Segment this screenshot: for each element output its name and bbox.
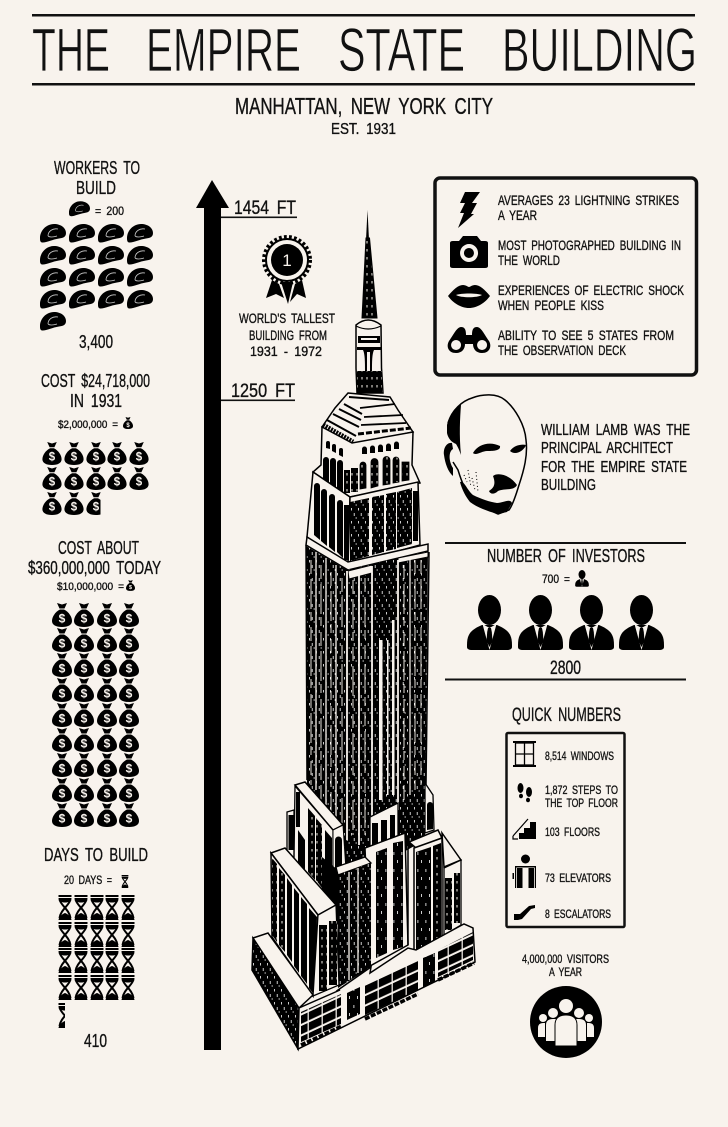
fact text: [498, 193, 684, 358]
illustration: empire state building: [252, 210, 475, 1049]
icon: visitors group: [530, 986, 602, 1058]
heading: quick numbers: QUICK NUMBERS: [512, 705, 621, 726]
tallest building caption: BUILDING FROM: [249, 328, 327, 343]
subtitle: EST. 1931: [331, 121, 396, 138]
panel: number of investors: [445, 542, 686, 680]
quick number text: 8 ESCALATORS: [545, 907, 611, 921]
title: STATE: [338, 16, 465, 84]
crown steps: [322, 393, 413, 445]
icon: binoculars: [448, 327, 490, 353]
lower right wings: [409, 830, 461, 960]
lower left wing: [271, 848, 339, 996]
height label: 1250 ft: 1250 FT: [231, 381, 295, 402]
visitors caption: 4,000,000 VISITORS: [522, 954, 609, 966]
panel: quick numbers: [506, 733, 624, 927]
panel: cost today: $360,000,000 TODAY: [28, 557, 161, 578]
icon: camera: [450, 236, 488, 268]
base: [252, 924, 475, 1049]
icon: first-place ribbon: 1: [282, 251, 292, 270]
panel: workers to build: 3,400: [79, 331, 113, 352]
icon: footprints: [518, 783, 532, 802]
second tier: [306, 472, 428, 570]
title: EMPIRE: [146, 16, 301, 84]
arrow: height scale: [196, 180, 229, 1050]
icon: elevator: [512, 854, 536, 888]
panel: days to build: 410: [84, 1030, 107, 1051]
quick number text: 103 FLOORS: [545, 825, 600, 839]
panel: number of investors: NUMBER OF INVESTORS: [487, 545, 645, 566]
panel: cost today: COST ABOUT: [58, 537, 139, 558]
panel: workers to build: BUILD: [76, 177, 116, 198]
panel: cost in 1931: IN 1931: [70, 390, 122, 411]
icon: first-place ribbon: [264, 238, 310, 304]
panel: number of investors: 2800: [550, 658, 581, 679]
quick number text: 73 ELEVATORS: [545, 871, 611, 885]
panel: building facts: [435, 178, 696, 375]
panel: cost in 1931: [41, 370, 150, 515]
panel: cost today: [28, 537, 161, 827]
fact text: ABILITY TO SEE 5 STATES FROM: [498, 328, 674, 343]
icon: lightning bolt: [458, 192, 480, 228]
panel: workers to build: WORKERS TO: [54, 157, 140, 178]
subtitle: MANHATTAN, NEW YORK CITY: [235, 93, 493, 119]
tallest building caption: WORLD'S TALLEST: [239, 311, 335, 326]
upper tier: [313, 427, 420, 497]
portrait: william lamb: [444, 395, 527, 514]
panel: days to build: [44, 844, 148, 1051]
caption: william lamb: [541, 422, 690, 494]
quick number text: 1,872 STEPS TO: [545, 783, 618, 797]
height label: 1454 ft: 1454 FT: [234, 198, 296, 219]
panel: number of investors: 700 =: [542, 572, 570, 586]
tallest building caption: 1931 - 1972: [250, 344, 322, 359]
icon: escalator: [514, 905, 535, 920]
fact text: A YEAR: [498, 208, 537, 223]
panel: cost in 1931: $2,000,000 =: [58, 419, 118, 431]
center front piers: [336, 833, 408, 988]
quick number text: THE TOP FLOOR: [545, 796, 618, 810]
fact text: WHEN PEOPLE KISS: [498, 298, 604, 313]
quick number text: 8,514 WINDOWS: [545, 749, 614, 763]
main shaft: [306, 545, 429, 885]
tallest building caption: [239, 311, 335, 359]
caption: william lamb: PRINCIPAL ARCHITECT: [541, 440, 673, 457]
panel: days to build: DAYS TO BUILD: [44, 844, 148, 865]
spire: [356, 210, 383, 393]
panel: days to build: 20 DAYS =: [64, 873, 112, 887]
fact text: THE OBSERVATION DECK: [498, 343, 626, 358]
panel: cost in 1931: COST $24,718,000: [41, 370, 150, 391]
icon: window: [513, 742, 536, 766]
visitors caption: A YEAR: [549, 967, 582, 979]
panel: workers to build: = 200: [95, 204, 124, 218]
title: THE: [32, 16, 110, 84]
icon: stairs: [513, 819, 536, 839]
fact text: THE WORLD: [498, 253, 560, 268]
upper setbacks: [287, 782, 434, 925]
subtitle: [235, 93, 493, 138]
icon: lips: [448, 285, 490, 308]
caption: william lamb: BUILDING: [541, 477, 596, 494]
visitors caption: [522, 954, 609, 979]
title: [32, 14, 697, 86]
panel: cost today: $10,000,000 =: [57, 581, 124, 593]
panel: workers to build: [40, 157, 153, 352]
quick number text: [545, 749, 618, 921]
